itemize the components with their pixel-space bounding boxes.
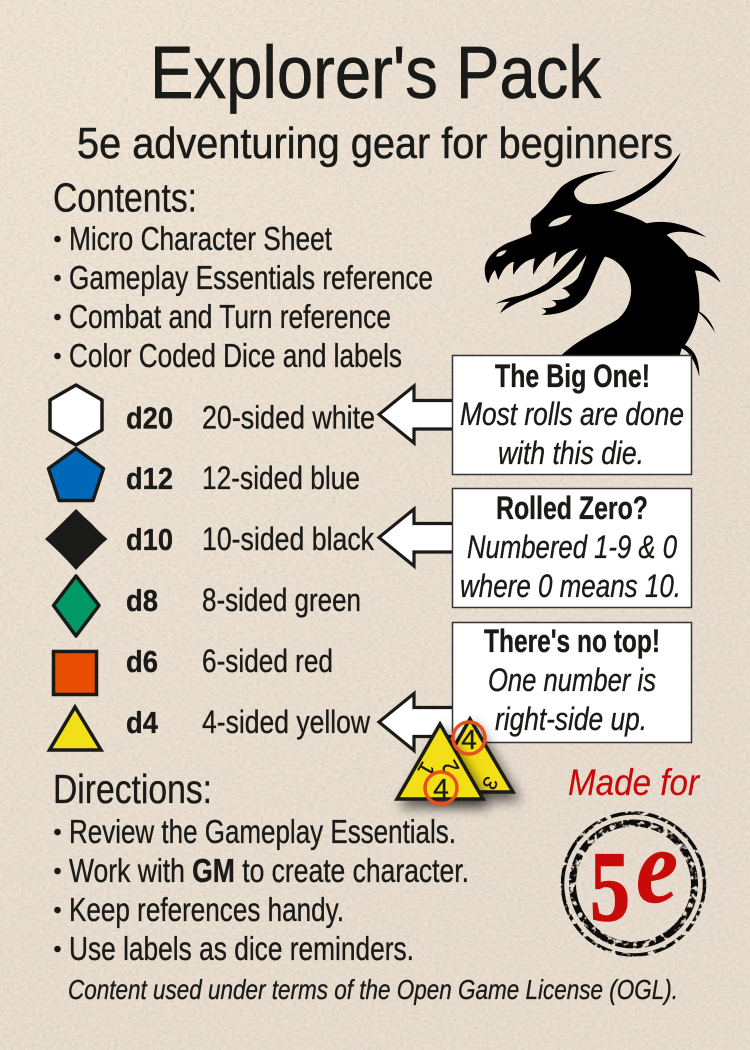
d10 row text: [126, 521, 375, 557]
subtitle: 5e adventuring gear for beginners: [77, 119, 673, 168]
icon: d10 kite: [45, 509, 108, 570]
contents list: Gameplay Essentials reference: [69, 259, 433, 296]
contents section: [53, 174, 433, 374]
d4 row text: [126, 704, 371, 740]
front die number 4: 4: [433, 773, 449, 804]
d4 row text: 4-sided yellow: [202, 704, 371, 740]
callout: rolled zero: where 0 means 10.: [460, 568, 681, 604]
d6 row text: d6: [126, 644, 158, 679]
icon: d8 diamond: [54, 576, 99, 636]
icon: d6 square: [54, 652, 96, 694]
highlight ring back: [453, 722, 485, 754]
callout: rolled zero: Numbered 1-9 & 0: [467, 529, 677, 565]
d4 row text: d4: [126, 705, 159, 740]
made for label: Made for: [568, 762, 701, 803]
d12 row text: [126, 460, 360, 496]
title: Explorer's Pack: [150, 31, 602, 114]
callout: the big one: with this die.: [498, 435, 644, 471]
callout: no top: There's no top!: [484, 623, 660, 659]
icon: d20 hexagon: [50, 385, 102, 445]
back die: [428, 719, 513, 792]
back die number 4: 4: [461, 724, 477, 755]
icon: d4 triangle: [50, 707, 101, 750]
contents list: Color Coded Dice and labels: [69, 337, 402, 374]
directions list: Use labels as dice reminders.: [69, 930, 414, 967]
d12 row text: d12: [126, 461, 173, 496]
contents list: Micro Character Sheet: [69, 220, 332, 257]
directions list: Review the Gameplay Essentials.: [69, 813, 456, 850]
callout: rolled zero: [452, 488, 692, 608]
dice list: [45, 385, 375, 750]
contents list: Combat and Turn reference: [69, 298, 391, 335]
callout: no top: [452, 622, 692, 742]
callout: the big one: The Big One!: [495, 358, 650, 394]
icon: 5e stamp: e: [636, 808, 678, 925]
front die: [397, 724, 483, 799]
d6 row text: [126, 643, 333, 679]
callout: no top: One number is: [488, 662, 656, 698]
d10 row text: 10-sided black: [202, 521, 375, 557]
callout: the big one: Most rolls are done: [460, 396, 684, 432]
d8 row text: [126, 582, 361, 618]
d8 row text: 8-sided green: [202, 582, 361, 618]
callout: rolled zero: Rolled Zero?: [496, 490, 648, 526]
front die side number 1: 1: [413, 758, 440, 781]
d20 row text: [126, 400, 375, 436]
d6 row text: 6-sided red: [202, 643, 333, 679]
d10 row text: d10: [126, 522, 173, 557]
icon: 5e stamp: 5: [590, 831, 630, 942]
d8 row text: d8: [126, 583, 158, 618]
d20 row text: 20-sided white: [202, 400, 375, 436]
icon: d12 pentagon: [48, 448, 104, 500]
d12 row text: 12-sided blue: [202, 460, 360, 496]
callout: the big one: [452, 356, 692, 474]
d20 row text: d20: [126, 400, 173, 436]
back die number 3: 3: [477, 772, 502, 793]
directions list: [54, 813, 469, 967]
directions list: Keep references handy.: [69, 891, 344, 928]
directions section: [53, 766, 469, 967]
icon: 5e stamp: [562, 808, 704, 955]
contents heading: Contents:: [53, 174, 197, 220]
callout: no top: right-side up.: [495, 701, 647, 737]
directions list: Work with GM to create character.: [69, 852, 469, 889]
icon: d4 dice illustration: [397, 719, 513, 804]
arrow: to d20: [379, 386, 454, 443]
contents list: [54, 220, 433, 374]
arrow: to d10: [379, 509, 454, 566]
directions heading: Directions:: [53, 766, 212, 812]
highlight ring front: [425, 772, 457, 804]
front die side number 2: 2: [437, 756, 464, 779]
icon: dragon head silhouette: [485, 153, 721, 377]
arrow: to d4: [379, 694, 454, 750]
